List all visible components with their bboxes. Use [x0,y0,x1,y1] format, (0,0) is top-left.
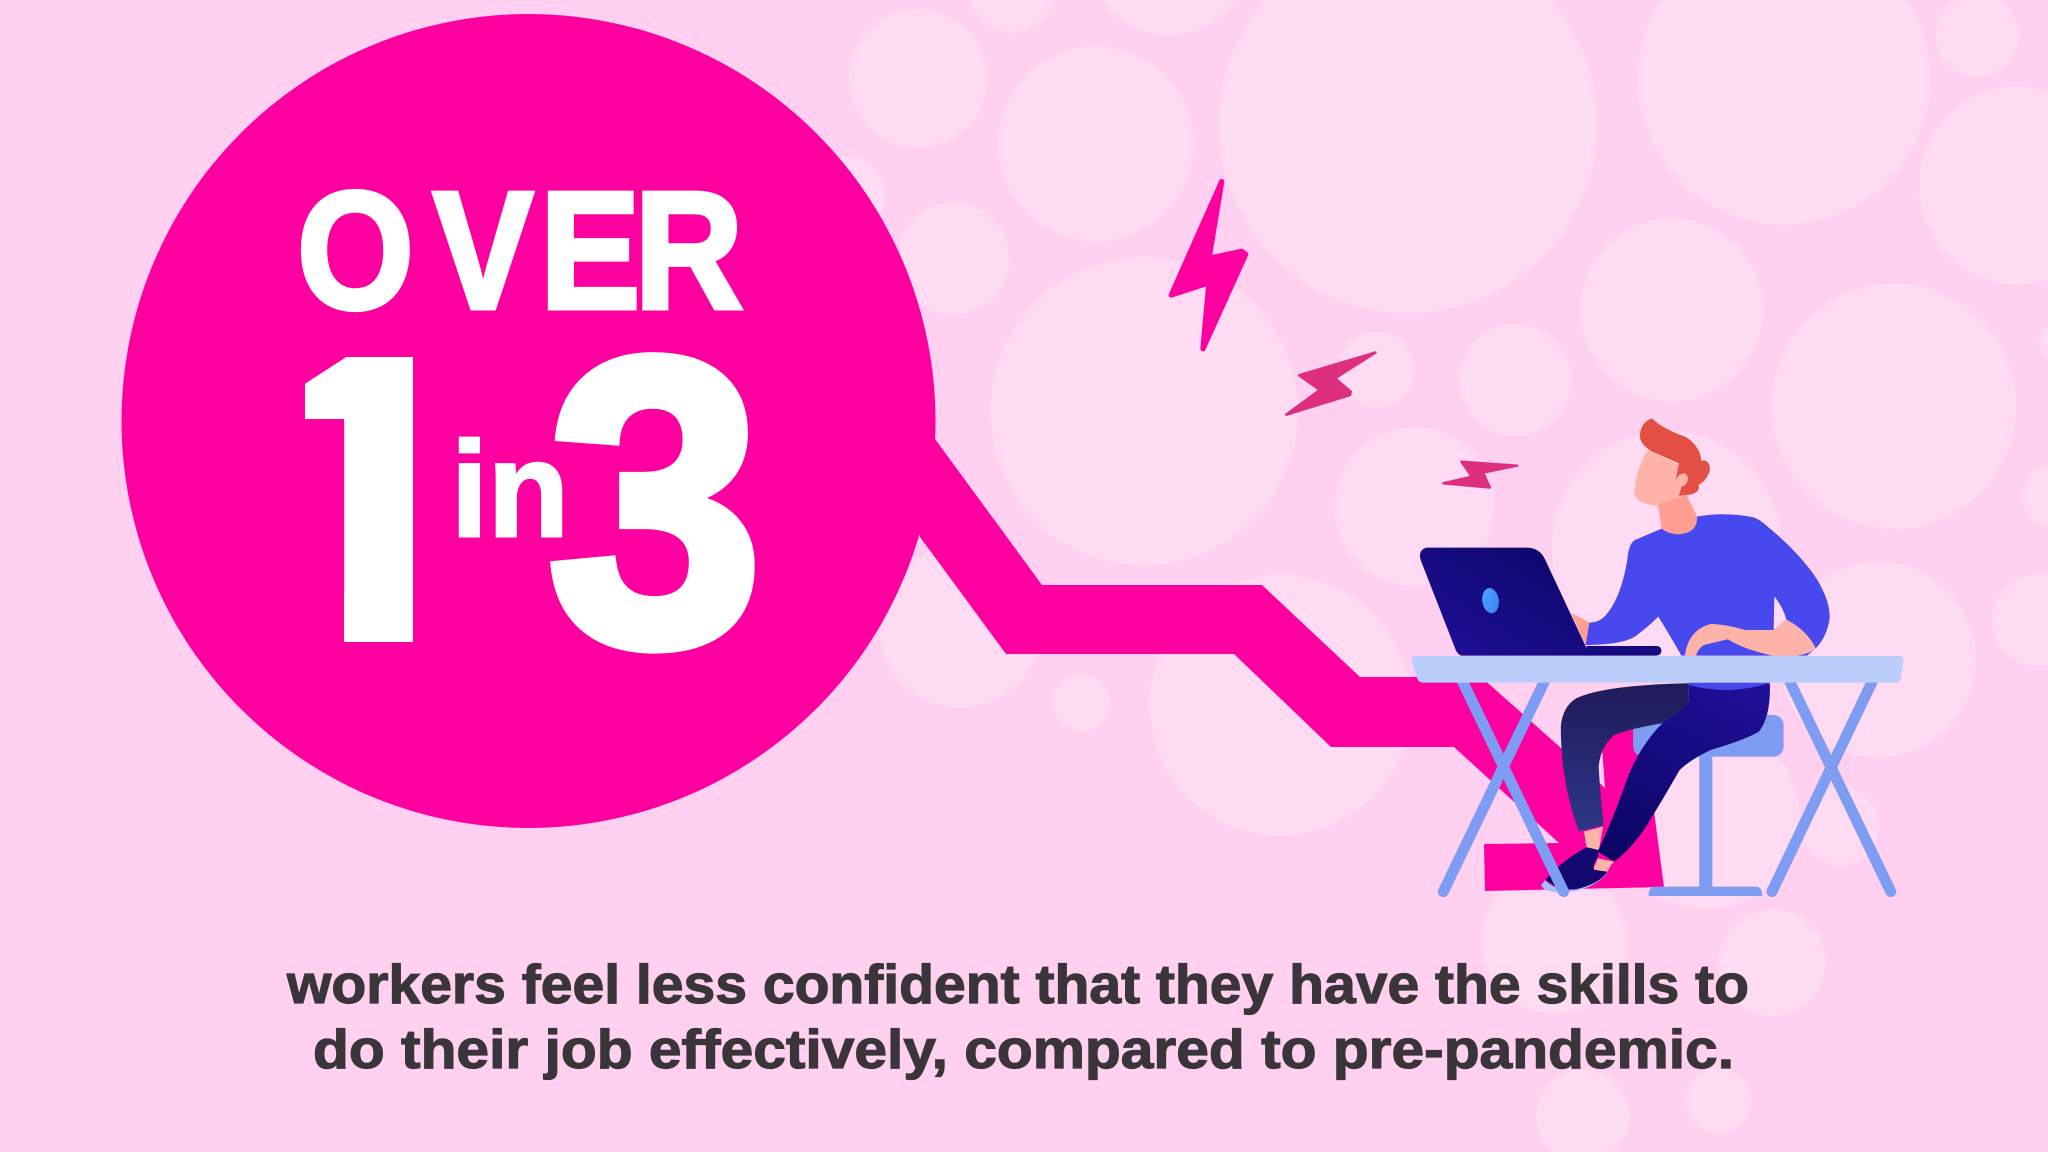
caption [286,953,1749,1080]
background bubbles [807,0,2048,1152]
front leg [1598,683,1770,862]
laptop [1420,548,1661,656]
stool [1633,715,1784,896]
back leg [1561,683,1688,832]
numeral 1: 1 [255,271,483,729]
hair [1640,418,1710,496]
OVER: OVER [297,157,743,344]
neck [1657,495,1697,534]
icon: small bolt [1443,462,1517,488]
sweater hem [1688,683,1770,690]
desk legs [1443,677,1891,892]
illustration: person at desk [1412,418,1904,896]
icon: medium bolt [1286,353,1375,415]
hand on laptop [1571,613,1590,645]
icon: lightning bolts [1171,182,1517,488]
desk top [1412,656,1904,683]
headline: OVER 1 in 3 [300,188,755,654]
caption line 2: do their job effectively, compared to pre-pandemic. [313,1018,1734,1080]
ear [1675,473,1688,487]
ankles [1584,827,1614,873]
icon: large bolt [1171,182,1246,349]
shoe [1541,847,1608,893]
forearm [1685,619,1816,656]
gap beside arm [1774,597,1786,630]
face [1634,450,1688,505]
in: in [451,414,569,565]
big circle [122,14,936,828]
downward trend arrow [900,400,1664,891]
numeral 3: 3 [548,275,763,730]
sweater [1586,514,1830,656]
caption line 1: workers feel less confident that they have the skills to [286,953,1749,1015]
